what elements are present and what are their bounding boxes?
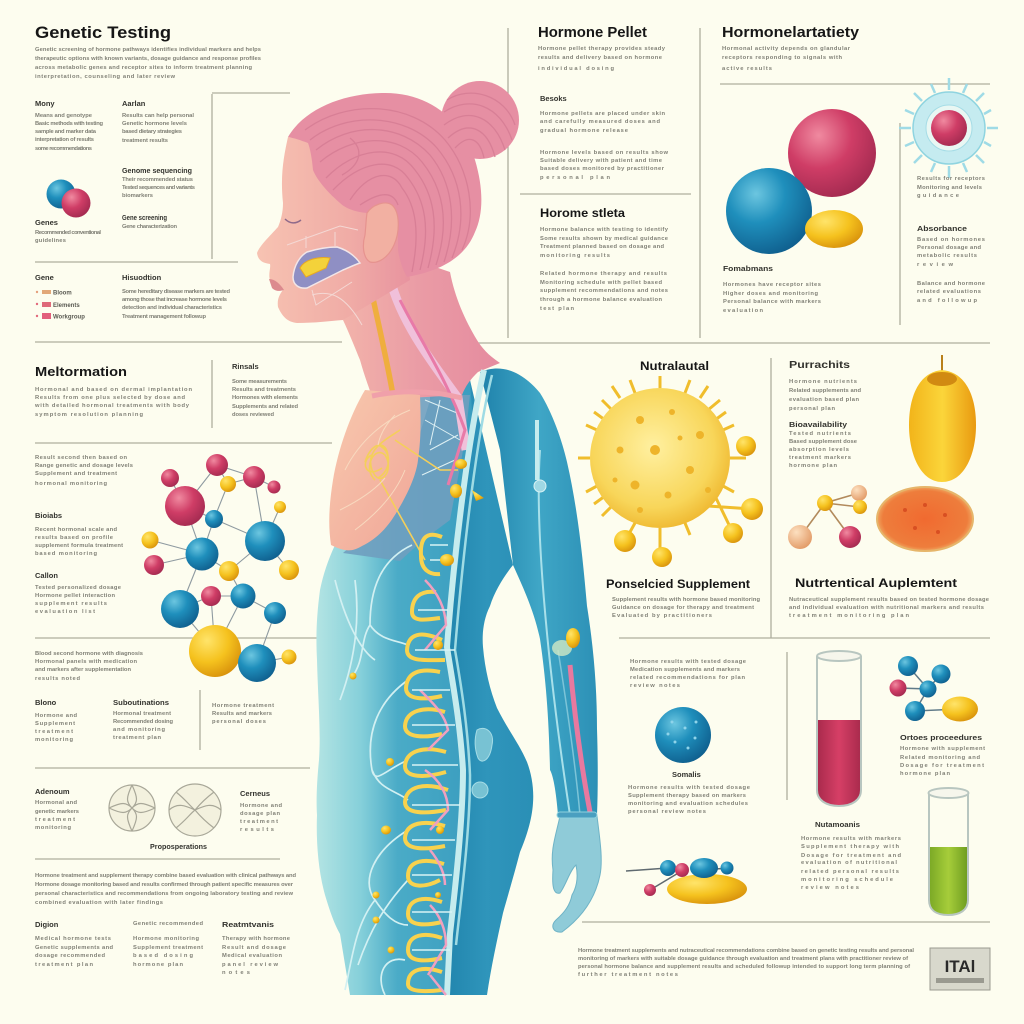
text block: supplement results: [35, 601, 107, 607]
text block: Medication supplements and markers: [630, 667, 740, 673]
intro text: interpretation, counseling and later review: [35, 74, 175, 80]
heading: proposperations: Proposperations: [150, 842, 207, 851]
heading: aarlan: Aarlan: [122, 99, 146, 108]
text block: [801, 836, 901, 891]
text block: Blood second hormone with diagnosis: [35, 651, 143, 657]
text block: Hormone with supplement: [900, 746, 985, 752]
text block: Hormone dosage monitoring based and results confirmed through patient specific measures over: [35, 882, 294, 888]
text block: Tested personalized dosage: [35, 585, 122, 591]
text block: Hormone treatment and supplement therapy combine based evaluation with clinical pathways and: [35, 873, 296, 879]
figure: arm vessel: [570, 665, 590, 812]
panel: hormonal activity: [722, 25, 998, 314]
text block: [35, 527, 123, 557]
legend: [36, 290, 85, 320]
text block: Gene characterization: [122, 224, 177, 230]
text block: treatment results: [122, 138, 168, 144]
text block: Evaluated by practitioners: [612, 613, 712, 619]
text block: Monitoring and levels: [917, 185, 982, 191]
panel: nutraceutical: [578, 355, 990, 990]
text block: Hormone results with tested dosage: [628, 785, 751, 791]
text block: Results from one plus selected by dose and: [35, 395, 185, 401]
text block: detection and individual characteristics: [122, 305, 222, 311]
text block: [35, 230, 101, 244]
text block: Related monitoring and: [900, 755, 980, 761]
text block: evaluation list: [35, 609, 95, 615]
text block: Supplement therapy with: [801, 844, 899, 850]
heading: fomabmans: Fomabmans: [723, 264, 773, 273]
heading: digion: Digion: [35, 920, 59, 929]
text block: Supplement: [35, 721, 75, 727]
text block: Medical hormone tests: [35, 936, 111, 942]
figure: body stripes: [447, 370, 580, 995]
heading: somalis: Somalis: [672, 770, 701, 779]
icon: spiked nutrient cell: [578, 376, 763, 567]
heading: hisuodtion: Hisuodtion: [122, 273, 162, 282]
text block: [917, 176, 985, 199]
text block: monitoring: [35, 825, 71, 831]
text block: Based supplement dose: [789, 439, 858, 445]
panel: genetic testing: [35, 23, 261, 320]
footer text: [578, 948, 914, 978]
text block: [630, 659, 747, 689]
text block: Results for receptors: [917, 176, 985, 182]
text block: [35, 651, 143, 682]
text block: Tested nutrients: [789, 431, 851, 437]
panel: hormone pellet: [538, 25, 669, 312]
text block: [35, 873, 296, 906]
icon: hormone spheres: [726, 109, 876, 254]
text block: Supplements and related: [232, 404, 298, 410]
heading: blono: Blono: [35, 698, 57, 707]
text block: evaluation based plan: [789, 397, 859, 403]
icon: orange dish: [877, 487, 973, 551]
text block: and carefully measured doses and: [540, 119, 660, 125]
heading: bioavailability: Bioavailability: [789, 420, 848, 429]
figure: hormone nodes: [350, 459, 484, 954]
text block: Recent hormonal scale and: [35, 527, 117, 533]
text block: Hormone treatment: [212, 703, 274, 709]
text block: Result and dosage: [222, 945, 287, 951]
text block: Hormone and: [35, 713, 77, 719]
heading: mony: Mony: [35, 99, 55, 108]
figure: pelvic organ: [472, 728, 493, 798]
figure: chest organ lines: [340, 410, 458, 560]
text block: individual dosing: [538, 66, 614, 72]
text block: Recommended dosing: [113, 719, 173, 725]
text block: Hormone levels based on results show: [540, 150, 668, 156]
text block: Personal balance with markers: [723, 299, 821, 305]
text block: Nutraceutical supplement results based on tested hormone dosage: [789, 597, 990, 603]
text block: Range genetic and dosage levels: [35, 463, 133, 469]
figure: ear: [363, 203, 398, 262]
heading: reatmtvanis: Reatmtvanis: [222, 920, 274, 929]
logo: ITAl: [945, 957, 975, 976]
figure: arm node: [552, 628, 580, 656]
text block: combined evaluation with later findings: [35, 900, 163, 906]
text block: results noted: [35, 676, 80, 682]
heading: bioiabs: Bioiabs: [35, 511, 62, 520]
text block: Supplement results with hormone based monitoring: [612, 597, 760, 603]
text block: Based on hormones: [917, 237, 985, 243]
text block: [222, 936, 291, 976]
text block: treatment monitoring plan: [789, 613, 909, 619]
text block: Hormonal panels with medication: [35, 659, 137, 665]
heading: cerneus: Cerneus: [240, 789, 270, 798]
text block: interpretation of results: [35, 137, 94, 143]
text block: [628, 785, 751, 815]
text block: gradual hormone release: [540, 128, 629, 134]
text block: guidance: [917, 193, 960, 199]
heading: meltormation: Meltormation: [35, 364, 127, 379]
text block: hormone plan: [133, 962, 183, 968]
text block: related personal results: [801, 869, 899, 875]
text block: review: [917, 262, 953, 268]
text block: Results and markers: [212, 711, 272, 717]
icon: molecule with yellow bead: [890, 656, 978, 722]
text block: [612, 597, 760, 619]
text block: Related supplements and: [789, 388, 861, 394]
text block: and individual evaluation with nutritional markers and results: [789, 605, 984, 611]
text block: receptors responding to signals with: [722, 55, 842, 61]
text block: Hormone and: [240, 803, 282, 809]
text block: Hormonal treatment: [113, 711, 171, 717]
text block: [240, 803, 282, 833]
heading: nutraceutical supplement: Nutrtentical Auplemtent: [795, 576, 957, 590]
figure: lung net: [422, 400, 462, 475]
legend: Workgroup: [53, 314, 85, 320]
text block: evaluation: [723, 308, 763, 314]
text block: doses reviewed: [232, 412, 274, 418]
text block: hormone plan: [900, 771, 950, 777]
text block: Genetic supplements and: [35, 945, 113, 951]
footer text: further treatment notes: [578, 972, 678, 978]
text block: Some measurements: [232, 379, 287, 385]
heading: adenoum: Adenoum: [35, 787, 70, 796]
figure: arm: [480, 369, 598, 815]
text block: Guidance on dosage for therapy and treatment: [612, 605, 754, 611]
icon: receptor cell: [899, 78, 998, 178]
text block: treatment: [35, 729, 73, 735]
legend: Bloom: [53, 290, 72, 296]
heading: absorbance: Absorbance: [917, 224, 967, 233]
text block: treatment plan: [35, 962, 93, 968]
text block: monitoring schedule: [801, 877, 894, 883]
text block: [540, 150, 668, 181]
icon: green test tube: [928, 788, 968, 915]
text block: and markers after supplementation: [35, 667, 131, 673]
text block: based monitoring: [35, 551, 97, 557]
text block: Recommended conventional: [35, 230, 101, 236]
text block: related evaluations: [917, 289, 981, 295]
text block: Hormone pellet interaction: [35, 593, 115, 599]
icon: blue textured sphere: [655, 707, 711, 763]
text block: [540, 111, 665, 134]
text block: Dosage for treatment: [900, 763, 984, 769]
text block: Hormone pellet therapy provides steady: [538, 46, 666, 52]
text block: [122, 289, 230, 320]
footer text: personal hormone balance and supplement results and scheduled followup intended to support long term planning of: [578, 964, 910, 970]
text block: monitoring and evaluation schedules: [628, 801, 748, 807]
text block: [917, 237, 985, 268]
figure: hair bun: [441, 81, 519, 159]
text block: treatment: [35, 817, 75, 823]
text block: [232, 379, 298, 418]
text block: Hormones have receptor sites: [723, 282, 821, 288]
text block: Hormone pellets are placed under skin: [540, 111, 665, 117]
text block: Tested sequences and variants: [122, 185, 195, 191]
text block: [122, 113, 194, 144]
text block: review notes: [801, 885, 859, 891]
text block: monitoring: [35, 737, 73, 743]
text block: [35, 713, 77, 743]
text block: [35, 936, 113, 968]
heading: ortoes proceedures: Ortoes proceedures: [900, 733, 982, 742]
human figure: [257, 81, 601, 995]
figure: lips: [269, 279, 284, 291]
figure: shoulder vessel: [535, 420, 539, 480]
icon: yellow capsule: [909, 355, 976, 482]
heading: personalized supplement: Ponselcied Supplement: [606, 577, 750, 591]
text block: Results and treatments: [232, 387, 296, 393]
text block: [35, 455, 133, 487]
text block: and monitoring: [113, 727, 165, 733]
text block: Treatment planned based on dosage and: [540, 244, 664, 250]
text block: supplement formula treatment: [35, 543, 123, 549]
text block: evaluation of nutritional: [801, 860, 897, 866]
text block: hormone plan: [789, 463, 837, 469]
text block: symptom resolution planning: [35, 412, 143, 418]
title: hormone pellet: Hormone Pellet: [538, 25, 647, 41]
text block: [789, 379, 861, 412]
text block: Hormone balance with testing to identify: [540, 227, 669, 233]
figure: hair: [288, 93, 481, 277]
text block: Some hereditary disease markers are tested: [122, 289, 230, 295]
text block: notes: [222, 970, 250, 976]
panel: meltormation: [34, 362, 298, 976]
text block: sample and marker data: [35, 129, 97, 135]
text block: Monitoring schedule with pellet based: [540, 280, 662, 286]
legend: Elements: [53, 303, 80, 309]
text block: Hormone monitoring: [133, 936, 199, 942]
text block: [212, 703, 274, 725]
intro text: Genetic screening of hormone pathways identifies individual markers and helps: [35, 47, 261, 53]
heading: rinsals: Rinsals: [232, 362, 259, 371]
text block: and followup: [917, 298, 977, 304]
heading: horome stleta: Horome stleta: [540, 206, 625, 220]
text block: genetic markers: [35, 809, 79, 815]
text block: [35, 800, 79, 831]
text block: [35, 585, 122, 615]
text block: Suitable delivery with patient and time: [540, 158, 663, 164]
text block: [789, 597, 990, 619]
text block: biomarkers: [122, 193, 153, 199]
text block: Balance and hormone: [917, 281, 986, 287]
text block: personal doses: [212, 719, 266, 725]
text block: Dosage for treatment and: [801, 853, 901, 859]
figure: hair strands: [305, 109, 470, 272]
figure: neck vessels: [366, 265, 466, 485]
icon: red test tube: [817, 651, 861, 806]
text block: [34, 387, 192, 418]
text block: results and delivery based on hormone: [538, 55, 663, 61]
text block: Some results shown by medical guidance: [540, 236, 669, 242]
heading: genome sequencing: Genome sequencing: [122, 166, 192, 175]
text block: Supplement therapy based on markers: [628, 793, 746, 799]
molecule network: [142, 454, 299, 682]
text block: [538, 46, 666, 72]
icon: paired spheres: [46, 180, 90, 218]
text block: Personal dosage and: [917, 245, 981, 251]
heading: besoks: Besoks: [540, 94, 567, 103]
icon: small molecule: [788, 485, 867, 549]
figure: jaw cross section: [287, 226, 362, 325]
text block: [35, 113, 103, 152]
text block: supplement recommendations and notes: [540, 288, 668, 294]
heading: nutralautal: Nutralautal: [640, 359, 709, 373]
text block: personal characteristics and recommendations from ongoing laboratory testing and review: [35, 891, 293, 897]
text block: Hormonal and: [35, 800, 77, 806]
text block: [723, 282, 821, 314]
text block: [113, 711, 173, 741]
logo: [930, 948, 990, 990]
heading: suboutinations: Suboutinations: [113, 698, 169, 707]
text block: Therapy with hormone: [222, 936, 291, 942]
text block: Hormone results with markers: [801, 836, 901, 842]
text block: dosage recommended: [35, 953, 105, 959]
text block: [133, 921, 203, 968]
figure: face: [257, 137, 410, 323]
text block: Basic methods with testing: [35, 121, 103, 127]
footer text: Hormone treatment supplements and nutraceutical recommendations combine based on genetic testing results and personal: [578, 948, 914, 954]
text block: personal plan: [789, 406, 835, 412]
text block: Results can help personal: [122, 113, 194, 119]
text block: metabolic results: [917, 253, 977, 259]
text block: Treatment management followup: [122, 314, 206, 320]
text block: dosage plan: [240, 811, 280, 817]
intro text: across metabolic genes and receptor sites to inform treatment planning: [35, 65, 252, 71]
text block: treatment plan: [113, 735, 161, 741]
figure: shoulder node: [534, 480, 546, 492]
text block: Genetic recommended: [133, 921, 203, 927]
icon: capsule molecule: [626, 858, 747, 904]
text block: Supplement and treatment: [35, 471, 117, 477]
footer text: monitoring of markers with suitable dosage guidance through evaluation and treatment plans with practitioner review of: [578, 956, 908, 962]
text block: Related hormone therapy and results: [540, 271, 667, 277]
text block: personal plan: [540, 175, 610, 181]
intro text: [35, 47, 261, 80]
text block: [917, 281, 986, 304]
text block: Hormonal activity depends on glandular: [722, 46, 851, 52]
text block: treatment: [240, 819, 278, 825]
text block: review notes: [630, 683, 680, 689]
text block: based dietary strategies: [122, 129, 182, 135]
figure: chest: [329, 390, 421, 550]
text block: panel review: [222, 962, 278, 968]
text block: [540, 227, 669, 259]
heading: purrachits: Purrachits: [789, 360, 851, 371]
text block: [722, 46, 851, 72]
figure: abdominal branch vessels: [335, 545, 412, 995]
icon: cell cross sections: [109, 784, 221, 836]
heading: callon: Callon: [35, 571, 58, 580]
text block: Genetic hormone levels: [122, 121, 187, 127]
heading: gene: Gene: [35, 273, 54, 282]
title: genetic testing: Genetic Testing: [35, 23, 171, 42]
text block: Medical evaluation: [222, 953, 282, 959]
text block: [122, 177, 195, 199]
figure: wrist cuff: [557, 812, 597, 818]
text block: related recommendations for plan: [630, 675, 745, 681]
text block: hormonal monitoring: [35, 481, 107, 487]
text block: results: [240, 827, 274, 833]
text block: Hormone results with tested dosage: [630, 659, 747, 665]
text block: absorption levels: [789, 447, 849, 453]
text block: with detailed hormonal treatments with body: [34, 403, 190, 409]
text block: Hormones with elements: [232, 395, 298, 401]
figure: lung shadow: [343, 395, 470, 561]
figure: torso back: [430, 380, 533, 995]
text block: test plan: [540, 306, 574, 312]
text block: Hormone nutrients: [789, 379, 857, 385]
text block: Hormonal and based on dermal implantation: [35, 387, 192, 393]
text block: Supplement treatment: [133, 945, 203, 951]
figure: torso front: [316, 380, 473, 995]
figure: neck: [343, 255, 500, 400]
text block: active results: [722, 66, 772, 72]
figure: spine ladder: [405, 535, 460, 995]
text block: guidelines: [35, 238, 66, 244]
text block: monitoring results: [540, 253, 610, 259]
text block: based doses monitored by practitioner: [540, 166, 665, 172]
text block: Their recommended status: [122, 177, 193, 183]
text block: some recommendations: [35, 146, 92, 152]
text block: Result second then based on: [35, 455, 127, 461]
figure: closed eye: [285, 219, 301, 223]
text block: Higher doses and monitoring: [723, 291, 818, 297]
text block: through a hormone balance evaluation: [540, 297, 662, 303]
title: hormonelartatiety: Hormonelartatiety: [722, 25, 859, 41]
heading: nutamoanis: Nutamoanis: [815, 820, 860, 829]
text block: [900, 746, 985, 777]
text block: [540, 271, 668, 312]
text block: based dosing: [133, 953, 193, 959]
intro text: therapeutic options with known variants, dosage guidance and response profiles: [35, 56, 261, 62]
text block: [789, 431, 858, 469]
text block: Means and genotype: [35, 113, 93, 119]
heading: genes: Genes: [35, 218, 58, 227]
text block: treatment markers: [789, 455, 851, 461]
text block: results based on profile: [35, 535, 114, 541]
figure: hand: [552, 816, 601, 932]
text block: among those that increase hormone levels: [122, 297, 227, 303]
heading: gene screening: Gene screening: [122, 213, 167, 222]
text block: personal review notes: [628, 809, 706, 815]
